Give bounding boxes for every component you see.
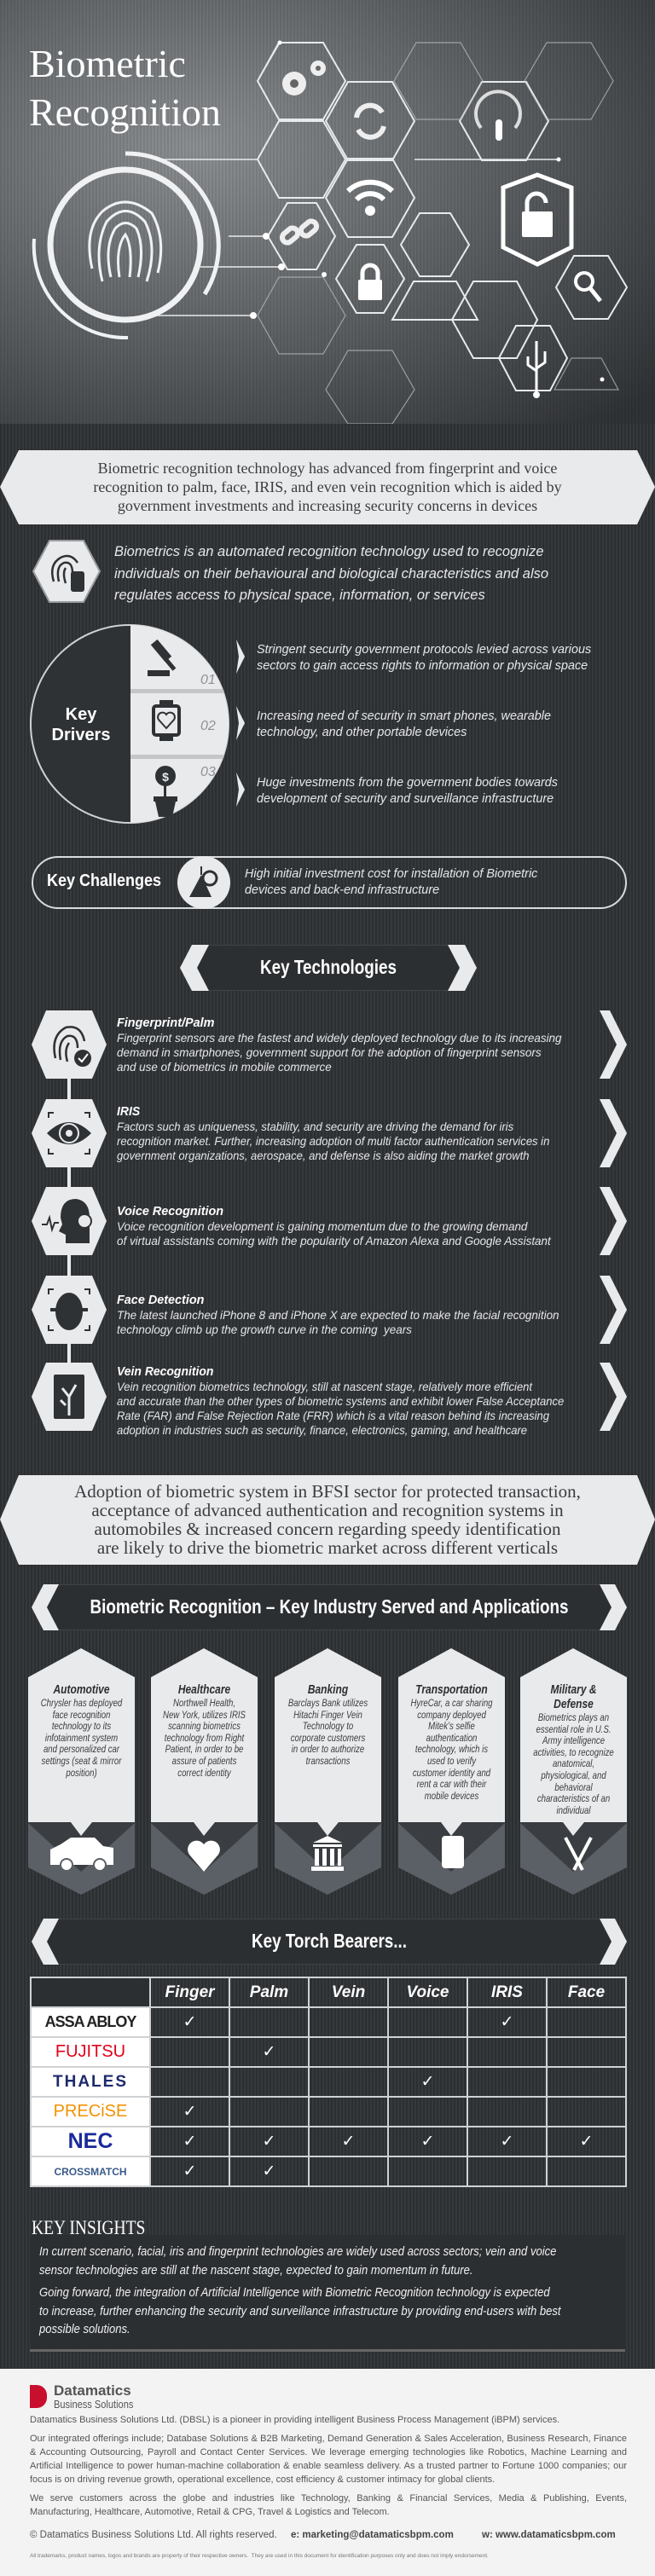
card: Transportation: used to verify — [427, 1755, 476, 1767]
card: Military & Defense: Army intelligence — [542, 1734, 605, 1746]
driver 02: Increasing need of security in smart phones, wearable — [257, 709, 551, 723]
torch bearers table: ✓ — [580, 2133, 593, 2151]
label: Key Drivers — [52, 705, 110, 744]
industry icons — [50, 1836, 593, 1872]
definition text: regulates access to physical space, information, or services — [114, 588, 485, 603]
card: Military & Defense — [533, 1682, 614, 1816]
card: Transportation: rent a car with their — [417, 1778, 486, 1790]
card: Banking: transactions — [306, 1755, 350, 1767]
icon: wifi — [348, 182, 392, 200]
icon: sync — [356, 106, 384, 137]
icon: touch — [476, 91, 520, 128]
key challenges pill: Key Challenges — [47, 871, 161, 890]
tech: Face Detection — [32, 1276, 627, 1344]
icon: smartwatch — [154, 700, 179, 741]
intro banner: recognition to palm, face, IRIS, and even vein recognition which is aided by — [93, 478, 562, 495]
industry cards — [28, 1648, 627, 1895]
heading: Key Technologies — [180, 945, 477, 991]
card: Banking: Hitachi Finger Vein — [293, 1709, 362, 1721]
card: Healthcare: technology from Right — [165, 1732, 244, 1744]
card: Military & Defense: Military & — [550, 1682, 597, 1697]
key challenges pill — [32, 856, 627, 909]
icon: link — [280, 219, 319, 245]
key drivers diagram: 01 — [200, 673, 216, 687]
driver 03 — [257, 775, 558, 806]
torch bearers table: Palm — [250, 1983, 288, 2000]
intro banner: Biometric recognition technology has advanced from fingerprint and voice — [98, 460, 557, 477]
footer: w: www.datamaticsbpm.com — [482, 2530, 616, 2540]
card: Military & Defense: anatomical, — [553, 1757, 594, 1769]
card: Transportation: HyreCar, a car sharing — [410, 1697, 493, 1709]
torch bearers table: ✓ — [501, 2133, 513, 2151]
driver 01: Stringent security government protocols levied across various — [257, 642, 591, 657]
footer: e: marketing@datamaticsbpm.com — [291, 2530, 454, 2540]
tech: Voice Recognition — [32, 1187, 627, 1255]
torch bearers table: ✓ — [501, 2013, 513, 2031]
icon: challenge — [177, 856, 230, 909]
key insights box: to increase, further enhancing the security and surveillance infrastructure by providing end-users with best — [39, 2304, 561, 2318]
footer: Our integrated offerings include; Database Solutions & B2B Marketing, Demand Generation & Sales Acceleration, Business Research, Finance & Accounting Outsourcing, Payroll and Contact Center Services. We leverage emerging technologies like Robotics, Machine Learning and Artificial Intelligence to power human-machine collaboration & enable seamless delivery. As a trusted partner to Fortune 1000 companies; our focus is on driving revenue growth, operational excellence, cost efficiency & customer intimacy for global clients. — [30, 2434, 627, 2485]
card: Healthcare: Healthcare — [178, 1682, 230, 1697]
driver 03: Huge investments from the government bodies towards — [257, 775, 558, 790]
driver 02: technology, and other portable devices — [257, 725, 467, 739]
intro banner: government investments and increasing security concerns in devices — [118, 497, 537, 514]
icon: fingerprint hexagon — [32, 540, 101, 603]
tech: Fingerprint/Palm: Fingerprint/Palm — [117, 1016, 214, 1030]
connector line — [67, 1074, 71, 1364]
card: Automotive: and personalized car — [43, 1743, 119, 1755]
icon: gears — [282, 61, 326, 96]
torch bearers table: ✓ — [183, 2133, 196, 2151]
card: Transportation: authentication — [426, 1732, 477, 1744]
tech: Voice Recognition: of virtual assistants coming with the popularity of Amazon Alexa and Google Assistant — [117, 1234, 551, 1247]
card: Automotive: settings (seat & mirror — [42, 1755, 121, 1767]
card: Transportation: mobile devices — [425, 1790, 478, 1802]
definition block — [32, 540, 548, 603]
key insights heading: KEY INSIGHTS — [32, 2217, 145, 2238]
driver arrows — [236, 640, 245, 807]
tech: Voice Recognition: Voice recognition development is gaining momentum due to the growing demand — [117, 1219, 527, 1233]
key drivers diagram: 03 — [200, 765, 216, 779]
card: Banking: Barclays Bank utilizes — [288, 1697, 368, 1709]
key drivers diagram: 02 — [200, 719, 216, 733]
card: Healthcare: New York, utilizes IRIS — [163, 1709, 246, 1721]
tech: Vein Recognition: and accurate than the other types of biometric systems and exhibit lower False Acceptance — [117, 1394, 564, 1408]
torch bearers table: Vein — [332, 1983, 365, 2000]
card: Military & Defense: Biometrics plays an — [538, 1711, 609, 1723]
card: Automotive: position) — [66, 1767, 97, 1779]
card: Automotive: face recognition — [53, 1709, 110, 1721]
key insights box — [30, 2235, 625, 2352]
logo — [30, 2382, 133, 2411]
card: Healthcare: correct identity — [177, 1767, 231, 1779]
torch bearers table: ✓ — [263, 2133, 275, 2151]
torch bearers table: ✓ — [183, 2162, 196, 2180]
heading: Key Technologies: Key Technologies — [260, 956, 397, 978]
logo: Business Solutions — [54, 2398, 133, 2411]
tech: Vein Recognition: adoption in industries such as security, finance, electronics, gaming, and healthcare — [117, 1423, 527, 1437]
tech: IRIS: IRIS — [117, 1104, 140, 1119]
card: Banking: in order to authorize — [292, 1743, 364, 1755]
card: Military & Defense: essential role in U.S. — [536, 1723, 612, 1735]
icon: lock — [358, 280, 382, 300]
footer: © Datamatics Business Solutions Ltd. All rights reserved. — [30, 2530, 277, 2540]
adoption banner: Adoption of biometric system in BFSI sector for protected transaction, — [74, 1481, 581, 1502]
tech: IRIS — [32, 1099, 627, 1167]
title: Biometric — [29, 42, 186, 85]
key drivers diagram — [30, 624, 591, 824]
card: Transportation: customer identity and — [413, 1767, 490, 1779]
driver 02 — [257, 709, 551, 739]
key drivers diagram: $ — [162, 770, 169, 784]
tech: Face Detection: Face Detection — [117, 1293, 204, 1307]
card: Military & Defense: activities, to recognize — [533, 1746, 614, 1758]
heading: Key Industry Served and Applications: Biometric Recognition – Key Industry Served and Applications — [90, 1595, 569, 1618]
intro banner — [0, 450, 655, 524]
card: Transportation — [410, 1682, 493, 1802]
icon: shield lock — [503, 175, 571, 264]
icon: fingerprint circle — [34, 153, 218, 338]
torch bearers table: IRIS — [491, 1983, 523, 2000]
torch bearers table: ✓ — [342, 2133, 355, 2151]
card: Military & Defense: Defense — [554, 1697, 594, 1711]
label: Key Drivers: Drivers — [52, 726, 110, 744]
adoption banner — [0, 1475, 655, 1565]
tech: IRIS: government organizations, aerospace, and defense is also aiding the market growth — [117, 1149, 529, 1162]
label: Key Drivers: Key — [66, 705, 96, 724]
icon: search — [576, 273, 593, 290]
icon: money plant — [154, 766, 177, 817]
torch bearers table: NEC — [68, 2129, 113, 2153]
tech: Vein Recognition: Vein Recognition — [117, 1364, 213, 1379]
key challenges pill: High initial investment cost for installation of Biometric — [245, 866, 537, 881]
driver 03: development of security and surveillance infrastructure — [257, 791, 554, 806]
torch bearers table: ASSA ABLOY — [45, 2013, 136, 2030]
key insights box: sensor technologies are still at the nascent stage, expected to gain momentum in future. — [39, 2263, 473, 2277]
definition text: Biometrics is an automated recognition technology used to recognize — [114, 544, 544, 559]
card: Automotive: Automotive — [53, 1682, 109, 1697]
torch bearers table: FUJITSU — [55, 2042, 125, 2061]
torch bearers table: THALES — [53, 2072, 128, 2091]
driver 01: sectors to gain access rights to information or physical space — [257, 658, 588, 673]
tech: Fingerprint/Palm: and use of biometrics in mobile commerce — [117, 1060, 332, 1074]
card: Automotive: Chrysler has deployed — [41, 1697, 122, 1709]
tech: Fingerprint/Palm: demand in smartphones, government support for the adoption of fingerprint sensors — [117, 1045, 542, 1059]
torch bearers table: CROSSMATCH — [54, 2166, 127, 2178]
torch bearers table: ✓ — [263, 2043, 275, 2061]
card: Healthcare: assure of patients — [172, 1755, 236, 1767]
card: Automotive: technology to its — [52, 1720, 111, 1732]
definition text — [114, 544, 548, 603]
tech: Fingerprint/Palm: Fingerprint sensors are the fastest and widely deployed technology due to its increasing — [117, 1031, 561, 1045]
tech: Voice Recognition: Voice Recognition — [117, 1204, 223, 1219]
card: Transportation: technology, which is — [415, 1743, 488, 1755]
torch bearers table: PRECiSE — [54, 2102, 127, 2121]
tech: Vein Recognition: Vein recognition biometrics technology, still at nascent stage, relatively more efficient — [117, 1380, 532, 1393]
card: Healthcare: Northwell Health, — [173, 1697, 235, 1709]
tech: Vein Recognition: Rate (FAR) and False Rejection Rate (FRR) which is a vital reason behind its increasing — [117, 1409, 549, 1422]
definition text: individuals on their behavioural and biological characteristics and also — [114, 566, 548, 582]
tech: Vein Recognition — [32, 1363, 627, 1437]
card: Banking: Banking — [308, 1682, 348, 1697]
hero: header graphic — [0, 0, 655, 424]
key challenges pill: devices and back-end infrastructure — [245, 883, 439, 897]
card: Military & Defense: physiological, and — [541, 1769, 606, 1781]
tech: IRIS: recognition market. Further, increasing adoption of multi factor authentication services in — [117, 1134, 549, 1148]
card: Transportation: company deployed — [417, 1709, 486, 1721]
heading: Key Industry Served and Applications — [32, 1584, 627, 1630]
icon: usb — [528, 341, 545, 392]
card: Military & Defense: individual — [556, 1804, 591, 1816]
torch bearers table — [30, 1977, 627, 2187]
footer — [0, 2369, 655, 2576]
key insights box: Going forward, the integration of Artificial Intelligence with Biometric Recognition technology is expected — [39, 2286, 550, 2300]
card: Military & Defense: characteristics of an — [537, 1792, 610, 1804]
tech: IRIS: Factors such as uniqueness, stability, and security are driving the demand for iris — [117, 1120, 513, 1133]
torch bearers table: Face — [568, 1983, 605, 2000]
footer: All trademarks, product names, logos and brands are property of their respective owners. They are used in this document for identification purposes only and does not imply endorsement. — [30, 2553, 489, 2559]
card: Transportation: Mitek’s selfie — [428, 1720, 475, 1732]
torch bearers table: Voice — [406, 1983, 449, 2000]
card: Banking: Technology to — [303, 1720, 353, 1732]
torch bearers table: Finger — [165, 1983, 215, 2000]
title — [29, 42, 221, 134]
card: Automotive — [41, 1682, 123, 1779]
adoption banner: are likely to drive the biometric market across different verticals — [97, 1537, 558, 1558]
footer: We serve customers across the globe and industries like Technology, Banking & Financial Services, Media & Publishing, Events, Manufacturing, Healthcare, Automotive, Retail & CPG, Travel & Logistics and Telecom. — [30, 2493, 627, 2517]
card: Transportation: Transportation — [415, 1682, 488, 1697]
tech: Fingerprint/Palm — [32, 1010, 627, 1079]
card: Banking — [288, 1682, 368, 1767]
card: Automotive: infotainment system — [45, 1732, 118, 1744]
torch bearers table: ✓ — [183, 2013, 196, 2031]
icon: gavel — [148, 640, 176, 676]
torch bearers table: ✓ — [421, 2073, 434, 2091]
tech: Face Detection: technology climb up the growth curve in the coming years — [117, 1323, 412, 1336]
heading: Key Torch Bearers — [32, 1919, 627, 1965]
card: Banking: corporate customers — [291, 1732, 365, 1744]
footer: Datamatics Business Solutions Ltd. (DBSL) is a pioneer in providing intelligent Business Process Management (iBPM) services. — [30, 2415, 559, 2425]
adoption banner: acceptance of advanced authentication and recognition systems in — [91, 1500, 564, 1520]
key insights box: possible solutions. — [39, 2323, 130, 2336]
adoption banner: automobiles & increased concern regarding speedy identification — [95, 1519, 560, 1539]
heading: Key Torch Bearers: Key Torch Bearers... — [252, 1930, 407, 1952]
title: Recognition — [29, 90, 221, 134]
driver 01 — [257, 642, 591, 673]
torch bearers table: ✓ — [421, 2133, 434, 2151]
card: Healthcare: Patient, in order to be — [165, 1743, 243, 1755]
torch bearers table: ✓ — [183, 2103, 196, 2121]
card: Healthcare — [163, 1682, 246, 1779]
card: Military & Defense: behavioral — [554, 1781, 593, 1793]
torch bearers table: ✓ — [263, 2162, 275, 2180]
tech: Face Detection: The latest launched iPhone 8 and iPhone X are expected to make the facial recognition — [117, 1308, 559, 1322]
card: Healthcare: scanning biometrics — [168, 1720, 241, 1732]
key insights box: In current scenario, facial, iris and fingerprint technologies are widely used across sectors; vein and voice — [39, 2245, 556, 2259]
logo: Datamatics — [54, 2382, 131, 2399]
